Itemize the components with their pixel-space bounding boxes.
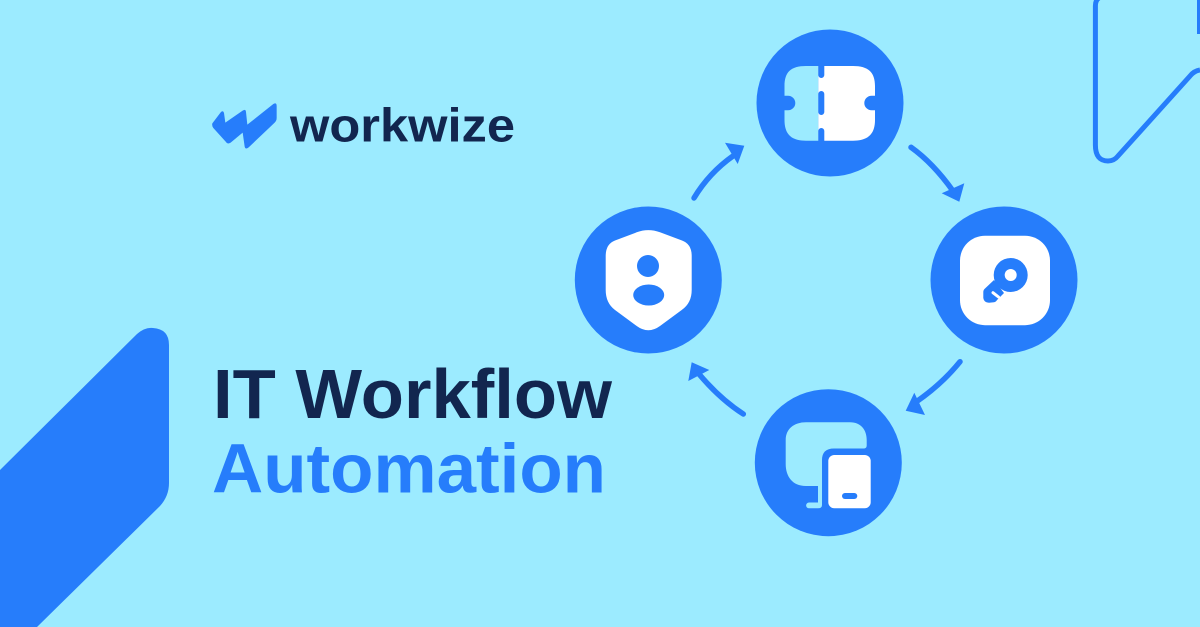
monitor bbox=[786, 422, 867, 508]
icon: key bbox=[930, 206, 1078, 354]
arrow: key to devices bbox=[906, 362, 960, 415]
key glyph bbox=[983, 258, 1028, 303]
arrow: devices to shield bbox=[688, 362, 743, 414]
decorative blue corner shape bbox=[0, 328, 169, 627]
logo bbox=[212, 98, 515, 152]
title line 1: IT Workflow bbox=[213, 355, 613, 433]
icon: devices bbox=[755, 389, 902, 536]
logo mark bbox=[212, 103, 277, 149]
logo wordmark: workwize bbox=[289, 98, 515, 152]
decorative outline shape top right bbox=[1095, 0, 1200, 161]
title line 2: Automation bbox=[212, 430, 606, 508]
icon: ticket bbox=[756, 30, 904, 176]
arrow: ticket to key bbox=[911, 147, 964, 202]
icon: shield with user bbox=[575, 206, 722, 354]
title bbox=[212, 355, 613, 508]
tablet bbox=[828, 455, 871, 508]
arrow: shield to ticket bbox=[694, 143, 744, 198]
